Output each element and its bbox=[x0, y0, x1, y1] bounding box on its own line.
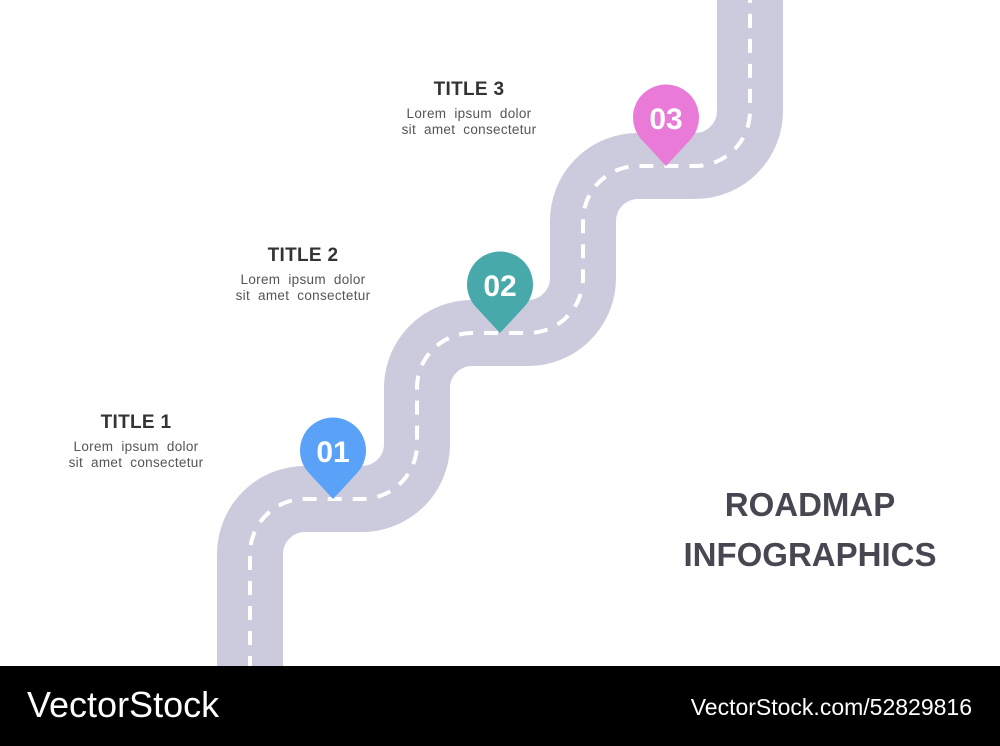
text: title 1 bbox=[69, 412, 203, 470]
text: title 3 bbox=[402, 79, 536, 137]
text: title 2: Lorem ipsum dolor bbox=[241, 272, 365, 287]
text: title 3: sit amet consectetur bbox=[402, 122, 536, 137]
footer url: VectorStock.com/52829816 bbox=[691, 694, 972, 720]
text: title 3: Lorem ipsum dolor bbox=[407, 106, 531, 121]
text: title 1: sit amet consectetur bbox=[69, 455, 203, 470]
heading: INFOGRAPHICS bbox=[683, 536, 936, 573]
footer bar bbox=[0, 666, 1000, 746]
text: title 1: Lorem ipsum dolor bbox=[74, 439, 198, 454]
pin 01: 01 bbox=[316, 436, 350, 469]
footer logo: VectorStock bbox=[27, 684, 219, 725]
text: title 2: TITLE 2 bbox=[268, 245, 338, 266]
text: title 1: TITLE 1 bbox=[101, 412, 171, 433]
text: title 2: sit amet consectetur bbox=[236, 288, 370, 303]
pin 02: 02 bbox=[483, 270, 517, 303]
text: title 3: TITLE 3 bbox=[434, 79, 504, 100]
text: title 2 bbox=[236, 245, 370, 303]
heading: ROADMAP bbox=[725, 486, 895, 523]
pin 03: 03 bbox=[649, 103, 683, 136]
heading bbox=[683, 486, 936, 573]
